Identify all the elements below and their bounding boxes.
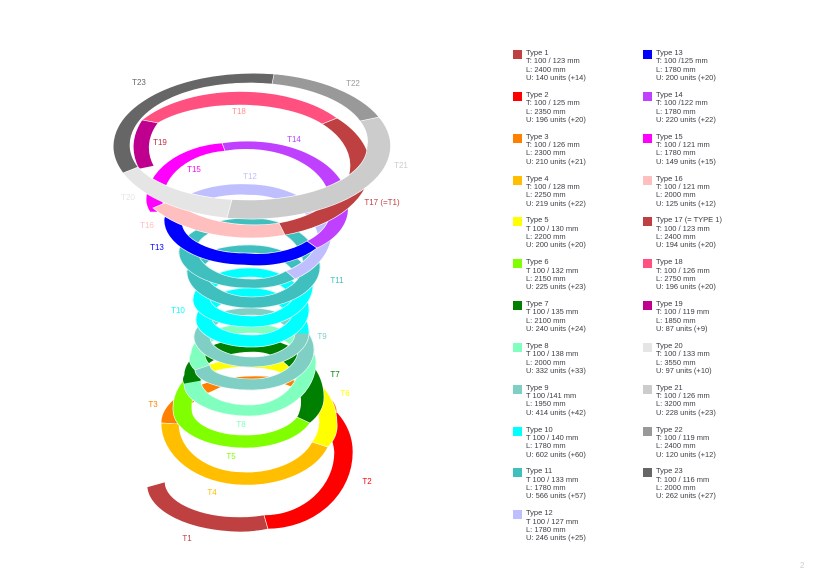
legend: Type 8: T 100 / 138 mm [526, 349, 578, 358]
legend: Type 3: U: 210 units (+21) [526, 157, 586, 166]
segment T12 [172, 184, 331, 279]
segment labels: T21 [394, 161, 408, 170]
segment T23 [113, 73, 274, 173]
legend: Type 20: Type 20 [656, 341, 683, 350]
legend: Type 19: L: 1850 mm [656, 316, 696, 325]
legend: Type 17: T: 100 / 123 mm [656, 224, 710, 233]
legend: Type 5: U: 200 units (+20) [526, 240, 586, 249]
legend: Type 7: T 100 / 135 mm [526, 307, 578, 316]
legend: Type 10: U: 602 units (+60) [526, 450, 586, 459]
legend: Type 4: Type 4 [526, 174, 549, 183]
legend: Type 12: Type 12 [526, 508, 553, 517]
segment T10 [193, 268, 313, 347]
segment T15 [146, 143, 225, 212]
legend: Type 14: U: 220 units (+22) [656, 115, 716, 124]
legend: Type 12 [513, 508, 586, 542]
legend: Type 4: U: 219 units (+22) [526, 199, 586, 208]
segment labels: T2 [362, 477, 372, 486]
legend: Type 13: Type 13 [656, 48, 683, 57]
segment labels: T22 [346, 79, 360, 88]
segment labels: T9 [317, 332, 327, 341]
legend: Type 15: U: 149 units (+15) [656, 157, 716, 166]
page number: 2 [800, 561, 804, 570]
segment labels: T23 [132, 78, 146, 87]
legend: Type 6 [513, 257, 586, 291]
legend: Type 3: T: 100 / 126 mm [526, 140, 580, 149]
segment T14 [222, 141, 348, 248]
legend: Type 23: U: 262 units (+27) [656, 491, 716, 500]
legend: Type 15: T: 100 / 121 mm [656, 140, 710, 149]
legend: Type 10: Type 10 [526, 425, 553, 434]
segment T13 [164, 205, 317, 266]
legend: Type 9: U: 414 units (+42) [526, 408, 586, 417]
legend: Type 17: Type 17 (= TYPE 1) [656, 215, 722, 224]
segment T4 [161, 423, 328, 485]
legend: Type 16 [643, 174, 716, 208]
legend: Type 18 [643, 257, 716, 291]
legend: Type 22: L: 2400 mm [656, 441, 696, 450]
segment labels: T14 [287, 135, 301, 144]
legend: Type 20: T: 100 / 133 mm [656, 349, 710, 358]
legend: Type 14: Type 14 [656, 90, 683, 99]
legend: Type 16: U: 125 units (+12) [656, 199, 716, 208]
legend: Type 6: L: 2150 mm [526, 274, 566, 283]
segment T18 [142, 91, 337, 124]
segment labels: T7 [330, 370, 340, 379]
segment labels: T19 [153, 138, 167, 147]
legend: Type 8 [513, 341, 586, 375]
legend: Type 20: L: 3550 mm [656, 358, 696, 367]
segment labels: T16 [140, 221, 154, 230]
segment T19 [133, 120, 158, 169]
legend: Type 11 [513, 466, 586, 500]
legend: Type 10: L: 1780 mm [526, 441, 566, 450]
legend: Type 12: L: 1780 mm [526, 525, 566, 534]
legend: Type 1 [513, 48, 586, 82]
legend: Type 4 [513, 174, 586, 208]
legend: Type 5: Type 5 [526, 215, 549, 224]
legend: Type 18: Type 18 [656, 257, 683, 266]
legend: Type 23: Type 23 [656, 466, 683, 475]
segment labels: T13 [150, 243, 164, 252]
legend: Type 12: T 100 / 127 mm [526, 517, 578, 526]
segment T11 [179, 218, 320, 308]
legend: Type 21 [643, 383, 716, 417]
segment labels: T18 [232, 107, 246, 116]
legend: Type 17: U: 194 units (+20) [656, 240, 716, 249]
segment labels [121, 78, 408, 543]
legend: Type 12: U: 246 units (+25) [526, 533, 586, 542]
segment labels: T20 [121, 193, 135, 202]
legend: Type 16: L: 2000 mm [656, 190, 696, 199]
legend: Type 19: Type 19 [656, 299, 683, 308]
segment T21 [227, 117, 391, 219]
legend: Type 5 [513, 215, 586, 249]
legend: Type 9: T 100 /141 mm [526, 391, 576, 400]
segment T16 [153, 200, 285, 238]
legend: Type 23: T: 100 / 116 mm [656, 475, 709, 484]
legend: Type 14: T: 100 /122 mm [656, 98, 708, 107]
legend: Type 15 [643, 132, 716, 166]
legend: Type 21: L: 3200 mm [656, 399, 696, 408]
legend: Type 23: L: 2000 mm [656, 483, 696, 492]
legend: Type 3: Type 3 [526, 132, 549, 141]
legend: Type 11: Type 11 [526, 466, 552, 475]
legend: Type 4: T: 100 / 128 mm [526, 182, 580, 191]
legend: Type 21: U: 228 units (+23) [656, 408, 716, 417]
segment labels: T4 [207, 488, 217, 497]
segment T6 [173, 368, 310, 448]
legend: Type 9: L: 1950 mm [526, 399, 566, 408]
legend: Type 13: T: 100 /125 mm [656, 56, 708, 65]
legend: Type 6: T 100 / 132 mm [526, 266, 578, 275]
legend: Type 19: U: 87 units (+9) [656, 324, 707, 333]
legend: Type 1: U: 140 units (+14) [526, 73, 586, 82]
segment T5 [200, 358, 337, 447]
legend: Type 5: T 100 / 130 mm [526, 224, 578, 233]
legend: Type 6: U: 225 units (+23) [526, 282, 586, 291]
legend: Type 14: L: 1780 mm [656, 107, 696, 116]
legend: Type 1: Type 1 [526, 48, 549, 57]
segment T2 [264, 412, 353, 529]
legend: Type 15: Type 15 [656, 132, 683, 141]
legend: Type 18: T: 100 / 126 mm [656, 266, 710, 275]
legend: Type 20: U: 97 units (+10) [656, 366, 712, 375]
legend: Type 22 [643, 425, 716, 459]
legend: Type 13: L: 1780 mm [656, 65, 696, 74]
segment labels: T12 [243, 172, 257, 181]
legend: Type 21: Type 21 [656, 383, 683, 392]
segment T22 [272, 74, 379, 121]
legend: Type 2 [513, 90, 586, 124]
legend: Type 22: Type 22 [656, 425, 683, 434]
segment labels: T5 [226, 452, 236, 461]
legend: Type 2: T: 100 / 125 mm [526, 98, 580, 107]
segment labels: T6 [340, 389, 350, 398]
legend: Type 13 [643, 48, 716, 82]
legend: Type 21: T: 100 / 126 mm [656, 391, 710, 400]
segment labels: T1 [182, 534, 192, 543]
legend: Type 8: Type 8 [526, 341, 549, 350]
segment T17 [279, 118, 370, 235]
segment T7 [183, 338, 324, 423]
legend: Type 9 [513, 383, 586, 417]
segment labels: T11 [330, 276, 344, 285]
legend: Type 7 [513, 299, 586, 333]
legend: Type 7: L: 2100 mm [526, 316, 566, 325]
legend: Type 18: U: 196 units (+20) [656, 282, 716, 291]
segment T8 [184, 324, 316, 416]
legend: Type 1: T: 100 / 123 mm [526, 56, 580, 65]
legend: Type 10 [513, 425, 586, 459]
segment T1 [147, 482, 268, 532]
legend: Type 10: T 100 / 140 mm [526, 433, 578, 442]
legend: Type 17 [643, 215, 722, 249]
legend: Type 16: Type 16 [656, 174, 683, 183]
legend: Type 14 [643, 90, 716, 124]
legend: Type 5: L: 2200 mm [526, 232, 566, 241]
legend: Type 11: T 100 / 133 mm [526, 475, 578, 484]
legend: Type 3 [513, 132, 586, 166]
legend: Type 2: L: 2350 mm [526, 107, 566, 116]
legend: Type 6: Type 6 [526, 257, 549, 266]
legend: Type 11: U: 566 units (+57) [526, 491, 586, 500]
segment labels: T3 [148, 400, 158, 409]
legend: Type 18: L: 2750 mm [656, 274, 696, 283]
segment labels: T17 (=T1) [364, 198, 400, 207]
legend: Type 23 [643, 466, 716, 500]
legend: Type 19: T: 100 / 119 mm [656, 307, 709, 316]
legend: Type 8: U: 332 units (+33) [526, 366, 586, 375]
legend: Type 16: T: 100 / 121 mm [656, 182, 710, 191]
legend: Type 7: U: 240 units (+24) [526, 324, 586, 333]
segment T20 [123, 167, 232, 218]
segment labels: T15 [187, 165, 201, 174]
legend: Type 11: L: 1780 mm [526, 483, 566, 492]
segment labels: T8 [236, 420, 246, 429]
legend: Type 19 [643, 299, 709, 333]
spiral chart [114, 74, 408, 543]
legend: Type 7: Type 7 [526, 299, 549, 308]
segment labels: T10 [171, 306, 185, 315]
segment T3 [161, 376, 337, 424]
legend: Type 22: U: 120 units (+12) [656, 450, 716, 459]
legend: Type 4: L: 2250 mm [526, 190, 566, 199]
legend: Type 1: L: 2400 mm [526, 65, 566, 74]
legend: Type 17: L: 2400 mm [656, 232, 696, 241]
legend: Type 15: L: 1780 mm [656, 148, 696, 157]
legend: Type 20 [643, 341, 712, 375]
legend: Type 3: L: 2300 mm [526, 148, 566, 157]
legend: Type 9: Type 9 [526, 383, 549, 392]
legend: Type 22: T: 100 / 119 mm [656, 433, 709, 442]
segment T9 [194, 308, 314, 390]
legend: Type 8: L: 2000 mm [526, 358, 566, 367]
legend: Type 2: Type 2 [526, 90, 549, 99]
legend: Type 2: U: 196 units (+20) [526, 115, 586, 124]
legend: Type 13: U: 200 units (+20) [656, 73, 716, 82]
